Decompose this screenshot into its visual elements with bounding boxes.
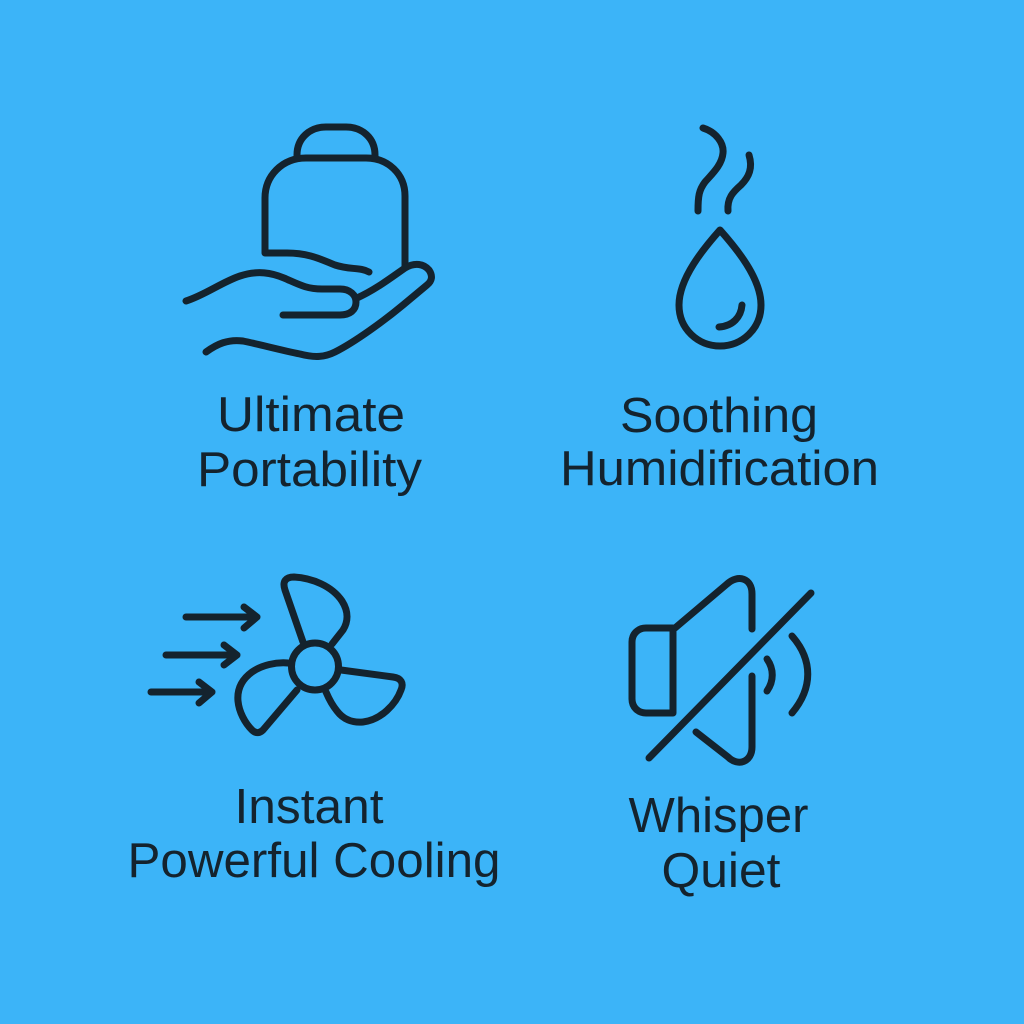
heading line: humidification: Humidification xyxy=(560,442,879,496)
panel: ultimate portability xyxy=(186,127,431,497)
heading line: powerful cooling: Powerful Cooling xyxy=(128,834,500,888)
icon: hand holding device xyxy=(186,127,431,356)
heading line: portability: Portability xyxy=(197,443,423,497)
heading: soothing: Soothing xyxy=(620,389,818,443)
icon: muted speaker xyxy=(632,579,811,762)
heading: whisper: Whisper xyxy=(628,789,808,843)
icon: water drop with steam xyxy=(679,128,761,346)
heading line: quiet: Quiet xyxy=(662,844,781,898)
panel: whisper quiet xyxy=(628,579,811,898)
heading: instant: Instant xyxy=(234,780,384,834)
heading: ultimate: Ultimate xyxy=(217,388,405,442)
panel: soothing humidification xyxy=(560,128,879,496)
icon: fan with air arrows xyxy=(151,577,402,733)
panel: instant powerful cooling xyxy=(128,577,500,888)
